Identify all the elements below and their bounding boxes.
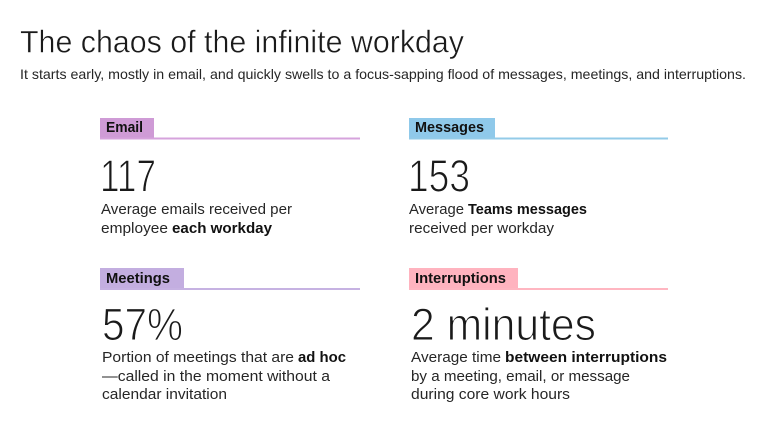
messages description: Teams messages <box>468 201 587 218</box>
interruptions description: between interruptions <box>505 349 667 366</box>
panel: email <box>100 118 360 237</box>
panel: meetings <box>100 268 360 403</box>
messages heading tag: Messages <box>415 120 484 136</box>
email description: Average emails received per <box>101 201 292 218</box>
interruptions description: Average time <box>411 349 501 366</box>
messages description: received per workday <box>409 220 554 237</box>
email number: 117 <box>100 150 156 202</box>
interruptions heading tag <box>409 268 668 290</box>
meetings description: —called in the moment without a <box>102 368 331 385</box>
panel: interruptions <box>409 268 668 403</box>
meetings heading tag: Meetings <box>106 271 170 287</box>
title: The chaos of the infinite workday <box>20 24 464 60</box>
email description: each workday <box>172 220 273 237</box>
meetings description: Portion of meetings that are <box>102 349 294 366</box>
email description: employee <box>101 220 168 237</box>
meetings description: ad hoc <box>298 349 346 366</box>
panel: messages <box>408 118 668 237</box>
messages description: Average <box>409 201 464 218</box>
meetings number: 57% <box>102 299 183 350</box>
interruptions heading tag: Interruptions <box>415 271 506 287</box>
meetings description: calendar invitation <box>102 386 227 403</box>
messages number: 153 <box>408 150 470 202</box>
email heading tag: Email <box>106 120 143 136</box>
email heading tag <box>100 118 360 140</box>
meetings heading tag <box>100 268 360 290</box>
messages heading tag <box>409 118 668 140</box>
interruptions description: during core work hours <box>411 386 570 403</box>
interruptions description: by a meeting, email, or message <box>411 368 630 385</box>
subtitle: It starts early, mostly in email, and quickly swells to a focus-sapping flood of messages, meetings, and interruptions. <box>20 66 746 82</box>
interruptions number: 2 minutes <box>411 299 596 350</box>
